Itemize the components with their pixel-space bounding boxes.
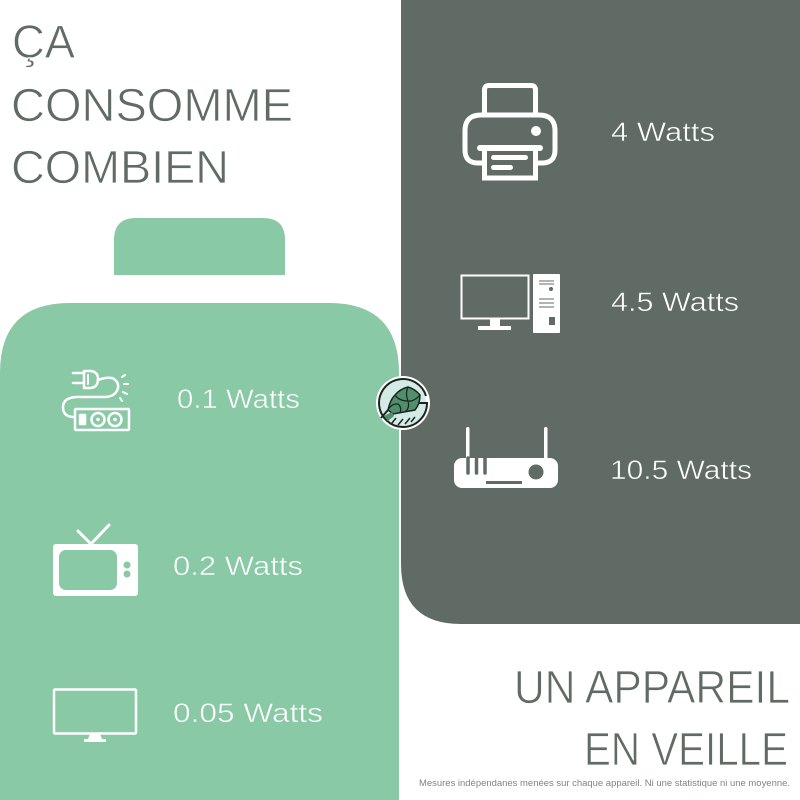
panel: green left panel — [0, 303, 399, 800]
label: 0.1 watts: 0.1 Watts — [177, 384, 300, 414]
title: CONSOMME — [11, 79, 293, 131]
icon: power strip — [63, 371, 129, 430]
icon: television — [53, 525, 138, 596]
label: 10.5 watts: 10.5 Watts — [610, 455, 752, 485]
panel: dark right panel — [401, 0, 800, 624]
icon: desktop computer — [462, 274, 560, 333]
heading: un appareil en veille — [514, 661, 790, 775]
icon: printer — [465, 86, 555, 178]
title: ÇA — [12, 16, 75, 68]
panel: green tab — [114, 218, 285, 275]
label: 4.5 watts: 4.5 Watts — [611, 287, 739, 317]
label: 4 watts: 4 Watts — [611, 117, 715, 147]
title: COMBIEN — [11, 141, 229, 193]
icon: artichoke logo — [376, 376, 430, 430]
label: 0.2 watts: 0.2 Watts — [173, 551, 303, 581]
title — [11, 16, 293, 193]
icon: flat screen — [54, 690, 136, 742]
icon: router — [454, 427, 558, 488]
footnote: Mesures indépendanes menées sur chaque appareil. Ni une statistique ni une moyenne. — [419, 778, 790, 789]
label: 0.05 watts: 0.05 Watts — [173, 698, 323, 728]
